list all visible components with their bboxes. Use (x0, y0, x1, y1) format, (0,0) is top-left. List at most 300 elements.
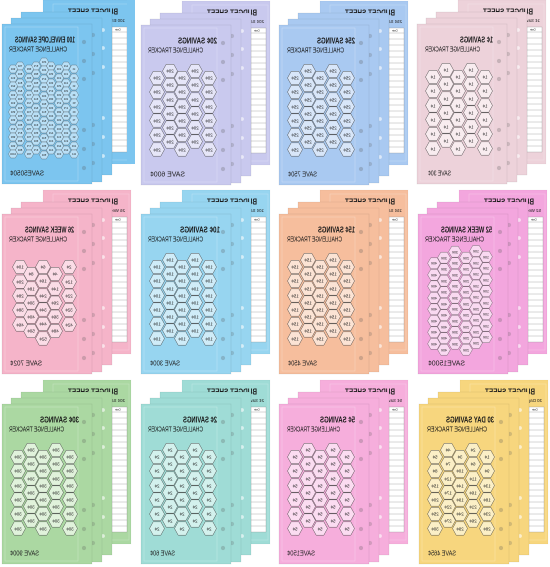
hexagon grid: 25¢ (316, 75, 324, 80)
back budget sheet: Date (114, 28, 120, 32)
hexagon grid: 15¢ (329, 314, 337, 319)
hexagon grid: 2¢ (206, 526, 212, 531)
back budget sheet: Date (391, 28, 398, 32)
hexagon grid: 20¢ (16, 279, 24, 284)
hexagon grid: 20¢ (191, 82, 199, 87)
back budget sheet: BUDGET SHEET (485, 388, 535, 396)
hexagon grid: 25¢ (329, 68, 337, 73)
hexagon grid: 20¢ (153, 75, 161, 80)
back budget sheet: Date (253, 408, 260, 412)
back budget sheet: 20¢ Savings (239, 19, 264, 24)
hexagon grid: 20¢ (153, 104, 161, 109)
hexagon grid: 5¢ (305, 447, 311, 452)
hexagon grid: 5¢ (317, 454, 323, 459)
tracker title: 15¢ SAVINGS (318, 226, 355, 234)
hexagon grid: 1¢ (443, 110, 449, 115)
stacked sheets with punch holes (279, 392, 389, 564)
hexagon grid 1 to 100: 78¢ (26, 152, 31, 156)
tracker title (425, 36, 493, 54)
hexagon grid: 30¢ (39, 511, 47, 516)
hexagon grid 1 to 100: 85¢ (17, 114, 22, 118)
hexagon grid: 10¢ (166, 328, 174, 333)
tracker title (287, 226, 355, 244)
stacked sheets with punch holes (141, 202, 251, 374)
hexagon grid: 40¢ (431, 261, 437, 265)
hexagon grid: 30¢ (27, 461, 35, 466)
savings total: SAVE 900¢ (10, 548, 39, 558)
hexagon grid 1 to 100: 81¢ (17, 81, 22, 85)
back budget sheet: BUDGET SHEET (207, 8, 257, 18)
hexagon grid: 15¢ (304, 257, 312, 262)
hexagon grid: 2¢ (192, 476, 198, 481)
stacked sheets with punch holes (2, 12, 112, 184)
hexagon grid (150, 64, 216, 156)
hexagon grid: 15¢ (316, 321, 324, 326)
hexagon grid: 30¢ (452, 342, 458, 346)
hexagon grid 1 to 100: 15¢ (63, 89, 68, 93)
hexagon grid: 1¢ (430, 131, 436, 136)
hexagon grid: 20¢ (178, 89, 186, 94)
hexagon grid 1 to 100: 53¢ (41, 127, 46, 131)
hexagon grid: 20¢ (463, 313, 469, 317)
back budget sheet (459, 190, 547, 354)
hexagon grid 1 to 100: 31¢ (56, 135, 61, 139)
hexagon grid: 3¢ (457, 454, 463, 459)
hexagon grid: 2¢ (192, 518, 198, 523)
hexagon grid: 6¢ (40, 264, 46, 269)
hexagon grid: 25¢ (291, 104, 299, 109)
back budget sheet: 26 Week (107, 208, 125, 213)
hexagon grid: 20¢ (205, 104, 213, 109)
savings total: SAVE 465¢ (428, 548, 456, 558)
hexagon grid: 1¢ (468, 124, 474, 129)
hexagon grid (288, 443, 354, 535)
hexagon grid: 15¢ (329, 286, 337, 291)
back budget sheet (320, 1, 408, 165)
hexagon grid 1 to 100: 44¢ (48, 148, 53, 152)
hexagon grid 1 to 100: 26¢ (56, 93, 61, 97)
savings total: SAVE 450¢ (288, 358, 317, 368)
hexagon grid: 1¢ (443, 138, 449, 143)
hexagon grid: 30¢ (14, 526, 22, 531)
tracker title: CHALLENGE TRACKER (425, 44, 480, 54)
hexagon grid: 25¢ (291, 132, 299, 137)
hexagon grid: 20¢ (473, 318, 479, 322)
hexagon grid: 20¢ (205, 89, 213, 94)
hexagon grid: 2¢ (167, 504, 173, 509)
hexagon grid 1 to 100: 58¢ (33, 72, 38, 76)
hexagon grid: 25¢ (291, 75, 299, 80)
hexagon grid: 6¢ (470, 461, 476, 466)
hexagon grid: 1¢ (455, 88, 461, 93)
hexagon grid: 40¢ (441, 336, 447, 340)
hexagon grid 1 to 100: 84¢ (17, 106, 22, 110)
tracker title (287, 36, 355, 54)
hexagon grid: 10¢ (153, 307, 161, 312)
hexagon grid 1 to 100: 79¢ (17, 64, 22, 68)
hexagon grid: 30¢ (441, 256, 447, 260)
stacked sheets with punch holes (141, 392, 251, 564)
hexagon grid: 10¢ (166, 300, 174, 305)
hexagon grid 1 to 100: 95¢ (10, 110, 15, 114)
tracker title: 52 WEEK SAVINGS (441, 226, 492, 234)
hexagon grid: 15¢ (343, 307, 351, 312)
hexagon grid: 40¢ (431, 296, 437, 300)
hexagon grid: 11¢ (469, 476, 477, 481)
savings total: SAVE 60¢ (150, 548, 175, 558)
hexagon grid 1 to 100: 12¢ (63, 64, 68, 68)
back budget sheet (320, 380, 408, 544)
hexagon grid: 20¢ (153, 147, 161, 152)
stacked sheets with punch holes (279, 13, 389, 185)
hexagon grid: 10¢ (166, 271, 174, 276)
hexagon grid: 15¢ (343, 336, 351, 341)
tracker title: CHALLENGE TRACKER (148, 424, 203, 434)
hexagon grid: 15¢ (329, 300, 337, 305)
hexagon grid: 25¢ (343, 75, 351, 80)
back budget sheet: 30¢ Savings (100, 398, 125, 403)
hexagon grid: 25¢ (291, 89, 299, 94)
hexagon grid: 15¢ (291, 336, 299, 341)
hexagon grid: 20¢ (473, 330, 479, 334)
hexagon grid: 2¢ (154, 468, 160, 473)
hexagon grid 1 to 100: 96¢ (10, 118, 15, 122)
hexagon grid: 10¢ (191, 328, 199, 333)
hexagon grid 1 to 100: 48¢ (41, 85, 46, 89)
hexagon grid: 26¢ (469, 518, 477, 523)
card: 30 cent savings (2, 380, 131, 564)
hexagon grid: 5¢ (305, 476, 311, 481)
hexagon grid: 15¢ (329, 328, 337, 333)
hexagon grid: 5¢ (317, 497, 323, 502)
hexagon grid: 17¢ (444, 490, 452, 495)
hexagon grid: 25¢ (329, 82, 337, 87)
hexagon grid: 1¢ (455, 103, 461, 108)
hexagon grid: 10¢ (483, 255, 489, 259)
hexagon grid: 10¢ (205, 293, 213, 298)
hexagon grid: 12¢ (65, 279, 73, 284)
hexagon grid: 10¢ (178, 307, 186, 312)
hexagon grid: 10¢ (483, 312, 489, 316)
back budget sheet (43, 0, 135, 164)
back budget sheet: 100 Envelope (98, 18, 125, 23)
hexagon grid: 10¢ (483, 289, 489, 293)
hexagon grid 1 to 100: 68¢ (26, 67, 31, 71)
hexagon grid: 5¢ (292, 511, 298, 516)
hexagon grid: 10¢ (178, 278, 186, 283)
hexagon grid: 15¢ (343, 293, 351, 298)
hexagon grid 1 to 100: 38¢ (48, 97, 53, 101)
hexagon grid: 1¢ (468, 138, 474, 143)
hexagon grid: 10¢ (178, 321, 186, 326)
hexagon grid 1 to 100: 10¢ (71, 144, 76, 148)
hexagon grid 1 to 100: 62¢ (33, 106, 38, 110)
hexagon grid: 34¢ (39, 307, 47, 312)
hexagon grid: 20¢ (463, 302, 469, 306)
savings total: SAVE1500¢ (428, 358, 465, 368)
back budget sheet: BUDGET SHEET (345, 8, 395, 18)
hexagon grid: 1¢ (455, 131, 461, 136)
stacked sheets with punch holes (279, 202, 389, 374)
back budget sheet (182, 190, 270, 354)
hexagon grid: 40¢ (441, 313, 447, 317)
hexagon grid: 10¢ (191, 300, 199, 305)
hexagon grid: 15¢ (291, 264, 299, 269)
savings total: SAVE 300¢ (150, 358, 180, 368)
hexagon grid: 20¢ (463, 336, 469, 340)
hexagon grid: 2¢ (167, 476, 173, 481)
hexagon grid: 25¢ (304, 68, 312, 73)
hexagon grid: 5¢ (305, 461, 311, 466)
hexagon grid: 5¢ (330, 490, 336, 495)
tracker title: 2¢ SAVINGS (183, 416, 217, 424)
hexagon grid: 2¢ (192, 461, 198, 466)
hexagon grid: 2¢ (206, 511, 212, 516)
tracker title (148, 416, 217, 434)
hexagon grid 1 to 100: 88¢ (17, 139, 22, 143)
hexagon grid: 5¢ (292, 454, 298, 459)
hexagon grid: 12¢ (444, 476, 452, 481)
hexagon grid: 2¢ (192, 447, 198, 452)
stacked sheets with punch holes (419, 392, 529, 564)
hexagon grid: 28¢ (16, 293, 24, 298)
hexagon grid 1 to 100: 92¢ (10, 84, 15, 88)
hexagon grid 1 to 100: 98¢ (10, 135, 15, 139)
hexagon grid: 20¢ (166, 82, 174, 87)
hexagon grid 1 to 100: 51¢ (41, 110, 46, 114)
hexagon grid: 20¢ (463, 279, 469, 283)
hexagon grid: 20¢ (153, 89, 161, 94)
hexagon grid: 5¢ (317, 468, 323, 473)
hexagon grid (428, 443, 494, 535)
hexagon grid: 15¢ (316, 293, 324, 298)
hexagon grid: 30¢ (39, 497, 47, 502)
tracker title: 1¢ SAVINGS (460, 36, 493, 44)
hexagon grid: 30¢ (27, 504, 35, 509)
hexagon grid: 2¢ (167, 447, 173, 452)
hexagon grid: 24¢ (456, 511, 464, 516)
hexagon grid: 1¢ (443, 81, 449, 86)
hexagon grid: 10¢ (153, 293, 161, 298)
hexagon grid: 2¢ (206, 454, 212, 459)
hexagon grid 1 to 100: 4¢ (72, 93, 76, 97)
hexagon grid (426, 63, 492, 155)
hexagon grid: 24¢ (39, 293, 47, 298)
hexagon grid: 10¢ (205, 278, 213, 283)
hexagon grid 1 to 100: 3¢ (72, 84, 76, 88)
hexagon grid 1 to 100: 14¢ (63, 81, 68, 85)
hexagon grid: 5¢ (330, 461, 336, 466)
hexagon grid: 10¢ (483, 266, 489, 270)
hexagon grid 1 to 100: 76¢ (26, 135, 31, 139)
back budget sheet (182, 380, 270, 544)
hexagon grid: 20¢ (178, 132, 186, 137)
hexagon grid: 30¢ (27, 490, 35, 495)
hexagon grid: 30¢ (27, 518, 35, 523)
hexagon grid: 20¢ (166, 68, 174, 73)
tracker title (425, 226, 492, 244)
hexagon grid: 48¢ (51, 328, 59, 333)
hexagon grid 1 to 100: 25¢ (56, 84, 61, 88)
hexagon grid: 2¢ (206, 483, 212, 488)
card: 25 cent savings (279, 1, 408, 185)
back budget sheet: BUDGET SHEET (484, 198, 534, 206)
hexagon grid: 30¢ (14, 468, 22, 473)
hexagon grid 1 to 100: 97¢ (10, 127, 15, 131)
hexagon grid: 15¢ (316, 278, 324, 283)
hexagon grid: 28¢ (483, 526, 491, 531)
hexagon grid: 2¢ (206, 468, 212, 473)
hexagon grid 1 to 100: 74¢ (26, 118, 31, 122)
hexagon grid: 25¢ (329, 139, 337, 144)
hexagon grid: 5¢ (330, 447, 336, 452)
hexagon grid: 16¢ (39, 278, 47, 283)
hexagon grid: 30¢ (14, 511, 22, 516)
hexagon grid: 10¢ (473, 284, 479, 288)
hexagon grid 1 to 100: 9¢ (72, 135, 76, 139)
hexagon grid: 10¢ (483, 278, 489, 282)
hexagon grid: 20¢ (205, 118, 213, 123)
hexagon grid 1 to 100: 65¢ (33, 131, 38, 135)
hexagon grid 1 to 100: 45¢ (41, 60, 46, 64)
back budget sheet: 2¢ Savings (241, 398, 264, 403)
hexagon grid 1 to 100: 56¢ (41, 153, 46, 157)
hexagon grid: 5¢ (344, 526, 350, 531)
hexagon grid: 10¢ (473, 295, 479, 299)
hexagon grid 1 to 100: 71¢ (26, 93, 31, 97)
hexagon grid: 25¢ (343, 89, 351, 94)
savings total: SAVE150¢ (287, 548, 315, 558)
hexagon grid: 30¢ (14, 483, 22, 488)
hexagon grid: 2¢ (179, 454, 185, 459)
hexagon grid: 30¢ (52, 447, 60, 452)
hexagon grid: 30¢ (14, 497, 22, 502)
hexagon grid: 30¢ (27, 300, 35, 305)
hexagon grid: 4¢ (445, 447, 451, 452)
hexagon grid 1 to 100: 18¢ (63, 114, 68, 118)
hexagon grid: 15¢ (343, 278, 351, 283)
hexagon grid: 5¢ (292, 483, 298, 488)
back budget sheet: 15¢ Savings (377, 208, 402, 213)
hexagon grid: 30¢ (66, 511, 74, 516)
hexagon grid 1 to 100: 27¢ (56, 101, 61, 105)
hexagon grid: 15¢ (343, 264, 351, 269)
hexagon grid: 15¢ (329, 271, 337, 276)
back budget sheet: Date (530, 218, 536, 222)
hexagon grid: 19¢ (456, 497, 464, 502)
hexagon grid 1 to 100: 2¢ (72, 76, 76, 80)
hexagon grid: 10¢ (178, 293, 186, 298)
hexagon grid: 20¢ (205, 147, 213, 152)
back budget sheet: Date (391, 408, 398, 412)
hexagon grid: 2¢ (179, 511, 185, 516)
hexagon grid: 5¢ (292, 526, 298, 531)
hexagon grid 1 to 100: 39¢ (48, 106, 53, 110)
hexagon grid: 30¢ (441, 267, 447, 271)
hexagon grid: 2¢ (167, 518, 173, 523)
hexagon grid: 1¢ (482, 103, 488, 108)
hexagon grid: 30¢ (52, 490, 60, 495)
hexagon grid 1 to 100: 30¢ (56, 127, 61, 131)
hexagon grid: 30¢ (452, 330, 458, 334)
back budget sheet: Date (531, 408, 538, 412)
hexagon grid: 2¢ (154, 497, 160, 502)
hexagon grid: 1¢ (468, 96, 474, 101)
hexagon grid: 1¢ (443, 96, 449, 101)
hexagon grid: 20¢ (166, 125, 174, 130)
hexagon grid 1 to 100: 99¢ (10, 144, 15, 148)
hexagon grid: 40¢ (431, 330, 437, 334)
back budget sheet: 25¢ Savings (377, 19, 402, 24)
hexagon grid: 2¢ (167, 490, 173, 495)
card: 15 cent savings (279, 190, 408, 374)
hexagon grid: 2¢ (206, 497, 212, 502)
hexagon grid: 46¢ (16, 322, 24, 327)
hexagon grid: 20¢ (153, 118, 161, 123)
hexagon grid: 25¢ (343, 132, 351, 137)
hexagon grid: 14¢ (51, 286, 59, 291)
hexagon grid: 2¢ (66, 264, 72, 269)
back budget sheet: BUDGET SHEET (483, 8, 533, 16)
tracker title: 10¢ SAVINGS (180, 226, 220, 234)
hexagon grid: 20¢ (191, 139, 199, 144)
hexagon grid: 20¢ (205, 132, 213, 137)
tracker title: 20¢ SAVINGS (178, 36, 217, 46)
hexagon grid 1 to 100: 66¢ (33, 139, 38, 143)
hexagon grid 1 to 100: 57¢ (33, 64, 38, 68)
hexagon grid 1 to 100: 28¢ (56, 110, 61, 114)
hexagon grid: 30¢ (452, 250, 458, 254)
hexagon grid: 30¢ (52, 518, 60, 523)
hexagon grid: 2¢ (179, 483, 185, 488)
hexagon grid: 20¢ (463, 267, 469, 271)
back budget sheet: Date (253, 218, 260, 222)
back budget sheet (182, 1, 270, 165)
tracker title: CHALLENGE TRACKER (425, 234, 484, 244)
hexagon grid: 15¢ (343, 321, 351, 326)
card: 100 envelope savings (2, 0, 135, 184)
hexagon grid 1 to 100: 100¢ (10, 152, 16, 156)
hexagon grid: 25¢ (343, 118, 351, 123)
hexagon grid: 40¢ (431, 273, 437, 277)
hexagon grid: 1¢ (482, 88, 488, 93)
hexagon grid: 25¢ (316, 104, 324, 109)
hexagon grid: 10¢ (205, 321, 213, 326)
hexagon grid: 25¢ (316, 118, 324, 123)
hexagon grid: 1¢ (430, 103, 436, 108)
hexagon grid: 20¢ (191, 68, 199, 73)
back budget sheet: BUDGET SHEET (345, 388, 395, 396)
hexagon grid: 25¢ (304, 125, 312, 130)
hexagon grid 1 to 100: 11¢ (71, 152, 76, 156)
hexagon grid: 1¢ (482, 117, 488, 122)
tracker title (9, 36, 75, 54)
hexagon grid: 8¢ (28, 271, 34, 276)
tracker title: CHALLENGE TRACKER (148, 234, 203, 244)
hexagon grid 1 to 100: 19¢ (63, 123, 68, 127)
hexagon grid: 10¢ (166, 314, 174, 319)
hexagon grid 1 to 100: 83¢ (17, 97, 22, 101)
card: 30 day savings (419, 380, 548, 564)
hexagon grid: 2¢ (167, 461, 173, 466)
hexagon grid: 36¢ (51, 314, 59, 319)
hexagon grid: 30¢ (452, 273, 458, 277)
hexagon grid: 5¢ (344, 454, 350, 459)
tracker title: 25¢ SAVINGS (317, 36, 355, 46)
hexagon grid: 30¢ (452, 319, 458, 323)
back budget sheet: 1¢ Savings (517, 18, 540, 23)
card: 10 cent savings (141, 190, 270, 374)
